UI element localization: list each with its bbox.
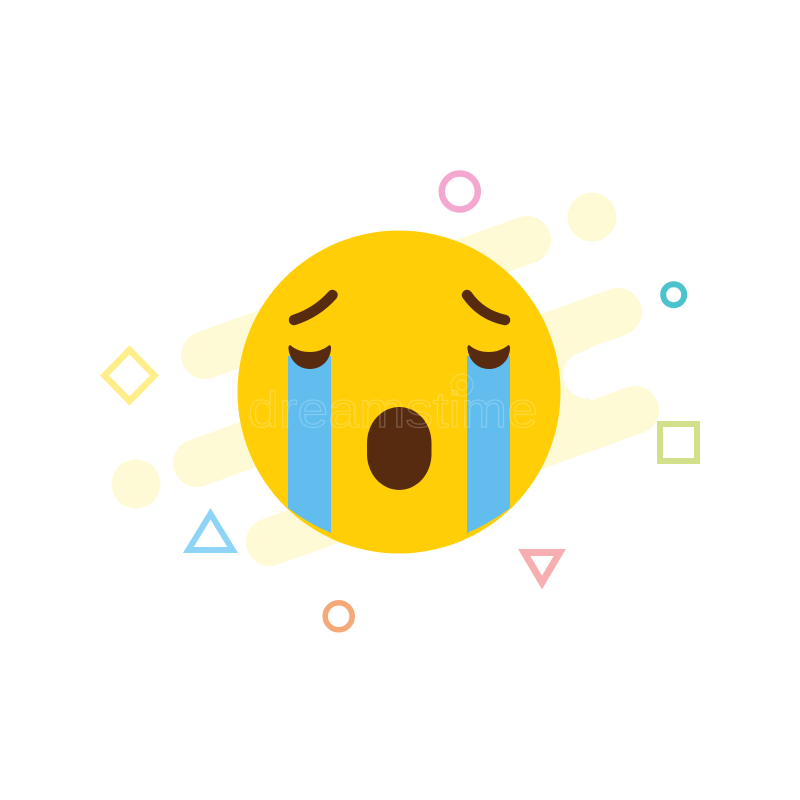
face circle <box>238 230 560 554</box>
pale dot: lower left <box>112 460 160 508</box>
yellow diamond <box>104 350 154 401</box>
green square <box>660 424 697 461</box>
left closed eye <box>288 345 331 369</box>
right eyebrow <box>467 295 505 320</box>
pink ring <box>442 174 478 210</box>
pink inverted triangle <box>524 552 560 582</box>
teal ring <box>663 284 684 305</box>
orange ring <box>325 603 352 630</box>
left tear <box>288 356 331 533</box>
blue triangle <box>188 514 233 550</box>
right closed eye <box>467 345 510 369</box>
emoji face <box>238 230 560 554</box>
background swooshes <box>197 240 650 542</box>
left eyebrow <box>294 295 332 320</box>
right tear <box>467 356 510 533</box>
pale dot: upper right <box>568 192 616 242</box>
watermark: dreamstime <box>248 382 538 438</box>
mouth <box>367 407 432 490</box>
